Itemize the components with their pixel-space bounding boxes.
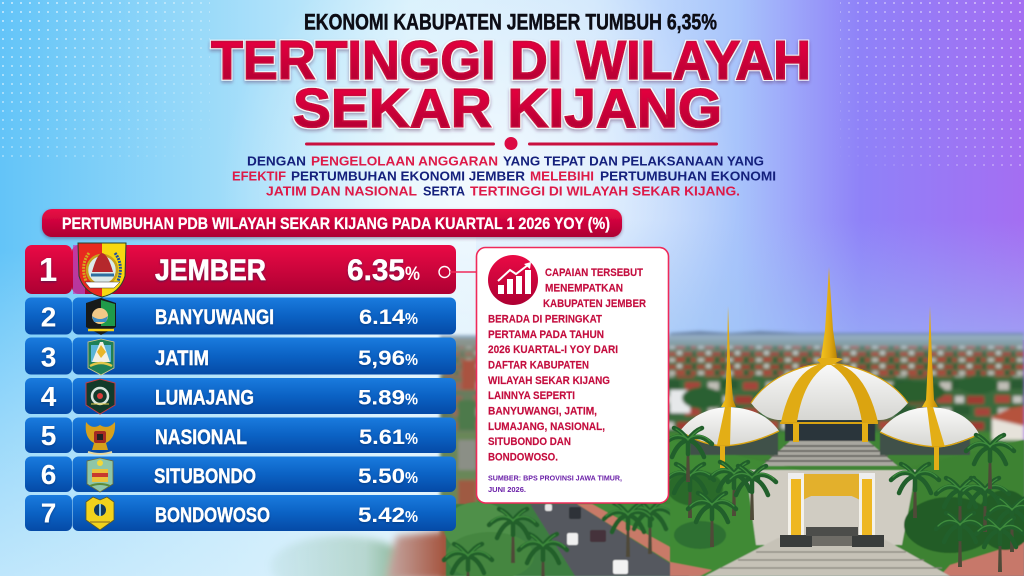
row 6: Situbondo: % xyxy=(405,470,418,487)
intro paragraph: MELEBIHI xyxy=(530,168,594,184)
connector from row 1 to callout xyxy=(439,266,477,278)
row 5: Nasional xyxy=(25,418,456,454)
chart heading pill: PERTUMBUHAN PDB WILAYAH SEKAR KIJANG PADA KUARTAL 1 2026 YOY (%) xyxy=(62,214,610,233)
icon: Jember crest xyxy=(78,243,126,297)
row 7: Bondowoso: 7 xyxy=(41,498,56,528)
title divider xyxy=(305,137,718,150)
row 2: Banyuwangi: 6.14 xyxy=(359,306,405,329)
callout card xyxy=(476,248,668,503)
callout body text: LUMAJANG, NASIONAL, xyxy=(488,421,605,433)
row 1: Jember: % xyxy=(405,264,420,285)
main title: TERTINGGI DI WILAYAH xyxy=(211,29,811,91)
intro paragraph: TERTINGGI DI WILAYAH SEKAR KIJANG. xyxy=(470,184,740,198)
main title: SEKAR KIJANG xyxy=(293,77,722,139)
row 2: Banyuwangi: % xyxy=(405,311,418,328)
callout body text: 2026 KUARTAL-I YOY DARI xyxy=(488,344,618,356)
intro paragraph: JATIM DAN NASIONAL xyxy=(266,184,417,198)
icon: Banyuwangi crest xyxy=(86,298,116,335)
callout body text: BONDOWOSO. xyxy=(488,452,558,464)
row 1: Jember xyxy=(25,243,456,297)
icon: Bondowoso crest xyxy=(86,497,114,530)
row 3: Jatim: 5,96 xyxy=(358,347,405,370)
right spire xyxy=(922,306,938,407)
row 4: Lumajang xyxy=(25,378,456,414)
row 6: Situbondo xyxy=(25,456,456,492)
row 7: Bondowoso: BONDOWOSO xyxy=(155,504,270,527)
source note: SUMBER: BPS PROVINSI JAWA TIMUR, xyxy=(488,474,622,482)
faded lower-left greenery xyxy=(270,530,455,576)
icon: Situbondo crest xyxy=(87,458,113,492)
town and horizon xyxy=(440,331,1024,576)
callout body text: DAFTAR KABUPATEN xyxy=(488,360,589,372)
left spire xyxy=(721,306,736,407)
row 6: Situbondo: 5.50 xyxy=(358,465,405,488)
palm trees xyxy=(664,428,1024,572)
icon: Garuda emblem xyxy=(86,422,115,454)
row 5: Nasional: 5.61 xyxy=(359,426,405,449)
callout body text: BANYUWANGI, JATIM, xyxy=(488,406,597,418)
row 1: Jember: 6.35 xyxy=(347,254,405,287)
source note xyxy=(488,474,622,494)
row 2: Banyuwangi: BANYUWANGI xyxy=(155,306,274,329)
intro paragraph: PERTUMBUHAN EKONOMI JEMBER xyxy=(291,168,525,184)
callout body text: LAINNYA SEPERTI xyxy=(488,390,575,402)
main spire xyxy=(821,267,837,358)
callout body text: BERADA DI PERINGKAT xyxy=(488,314,602,326)
callout body text: SITUBONDO DAN xyxy=(488,436,571,448)
row 3: Jatim xyxy=(25,338,456,375)
callout body text: MENEMPATKAN xyxy=(545,282,623,294)
callout body text: PERTAMA PADA TAHUN xyxy=(488,329,604,341)
row 3: Jatim: JATIM xyxy=(155,347,209,370)
kicker headline: EKONOMI KABUPATEN JEMBER TUMBUH 6,35% xyxy=(304,10,717,34)
row 7: Bondowoso xyxy=(25,495,456,531)
callout body text: CAPAIAN TERSEBUT xyxy=(545,267,643,279)
left dome xyxy=(680,407,779,468)
row 1: Jember: 1 xyxy=(39,251,57,288)
callout body text: KABUPATEN JEMBER xyxy=(543,298,646,310)
row 4: Lumajang: 5.89 xyxy=(358,386,405,410)
right dome xyxy=(880,407,979,470)
row 6: Situbondo: SITUBONDO xyxy=(154,465,256,488)
lower street scene xyxy=(441,502,694,576)
central dome xyxy=(751,358,908,442)
side colonnades xyxy=(690,433,778,455)
callout body text xyxy=(488,267,646,464)
chart heading pill xyxy=(42,209,622,237)
intro paragraph: PENGELOLAAN ANGGARAN xyxy=(311,154,498,168)
icon: Jawa Timur crest xyxy=(88,339,114,375)
intro paragraph xyxy=(232,154,776,198)
row 1: Jember: JEMBER xyxy=(155,254,266,287)
row 4: Lumajang: LUMAJANG xyxy=(155,386,254,410)
intro paragraph: SERTA xyxy=(423,184,465,198)
intro paragraph: YANG TEPAT DAN PELAKSANAAN YANG xyxy=(503,154,764,168)
gate xyxy=(780,473,884,547)
row 3: Jatim: % xyxy=(405,352,418,369)
intro paragraph: EFEKTIF xyxy=(232,168,286,184)
callout body text: WILAYAH SEKAR KIJANG xyxy=(488,375,610,387)
intro paragraph: DENGAN xyxy=(247,154,306,168)
row 4: Lumajang: % xyxy=(405,392,418,408)
source note: JUNI 2026. xyxy=(488,485,526,494)
lawns and plaza xyxy=(667,420,1024,576)
icon: Lumajang crest xyxy=(86,379,115,414)
row 6: Situbondo: 6 xyxy=(41,459,56,490)
icon: growth chart xyxy=(488,255,538,305)
row 3: Jatim: 3 xyxy=(41,342,56,372)
row 5: Nasional: 5 xyxy=(41,420,56,451)
intro paragraph: PERTUMBUHAN EKONOMI xyxy=(600,168,776,184)
row 2: Banyuwangi: 2 xyxy=(41,302,56,332)
row 4: Lumajang: 4 xyxy=(41,381,57,412)
row 5: Nasional: NASIONAL xyxy=(155,426,247,449)
row 7: Bondowoso: 5.42 xyxy=(358,504,405,527)
row 2: Banyuwangi xyxy=(25,298,456,335)
row 7: Bondowoso: % xyxy=(405,509,418,526)
main staircase xyxy=(762,441,898,466)
row 5: Nasional: % xyxy=(405,431,418,448)
main title xyxy=(211,29,811,139)
lower steps xyxy=(705,538,950,576)
photo: domed building and town xyxy=(270,267,1024,576)
